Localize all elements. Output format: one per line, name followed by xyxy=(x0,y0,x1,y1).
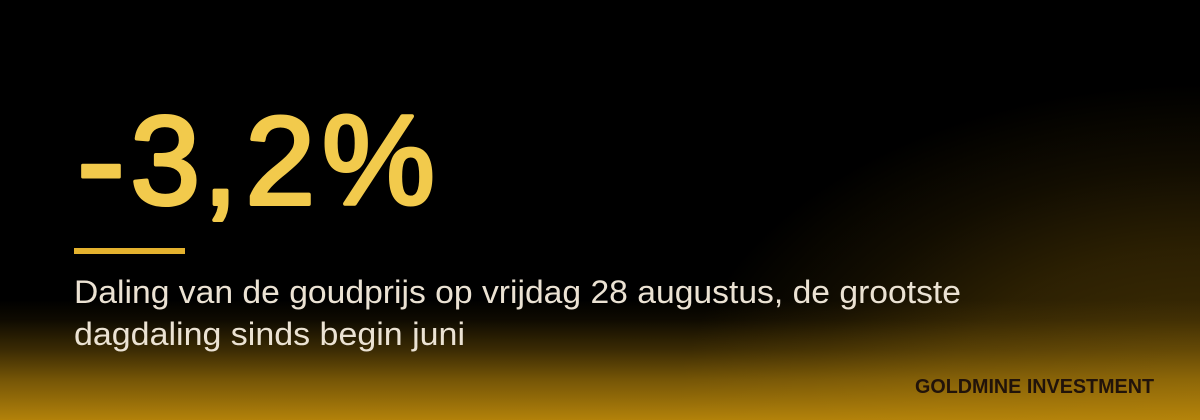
description text: dagdaling sinds begin juni xyxy=(74,316,465,352)
headline: -3,2%: % xyxy=(322,89,435,231)
description text xyxy=(74,274,961,352)
accent rule xyxy=(74,248,185,254)
headline: -3,2%: 3,2 xyxy=(130,92,315,231)
brand label: GOLDMINE INVESTMENT xyxy=(915,376,1154,398)
description text: Daling van de goudprijs op vrijdag 28 augustus, de grootste xyxy=(74,274,961,310)
headline: -3,2%: - xyxy=(76,75,126,243)
headline: -3,2% xyxy=(76,75,435,243)
